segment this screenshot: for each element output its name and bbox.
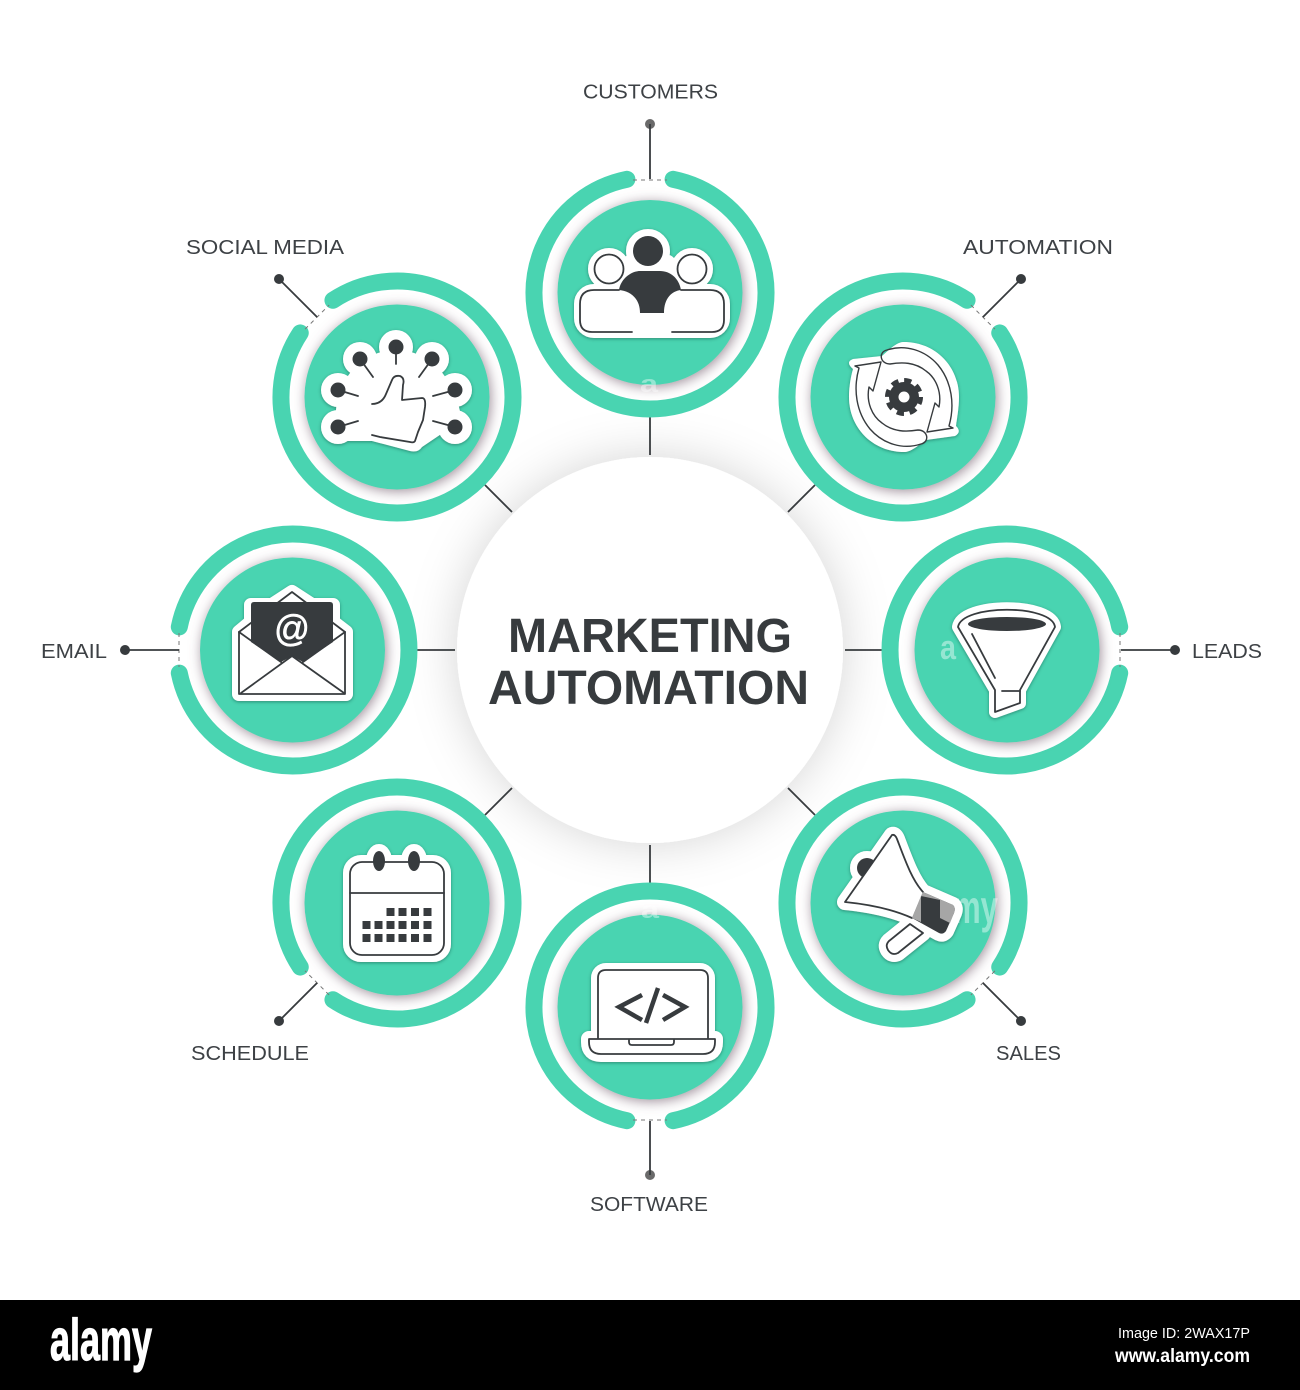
footer bar [0, 1300, 1300, 1390]
label: email: EMAIL [41, 640, 107, 663]
label: automation: AUTOMATION [963, 236, 1113, 259]
node: social media [235, 235, 561, 561]
node: sales [739, 739, 1065, 1065]
title [488, 610, 809, 715]
icon: funnel [958, 608, 1055, 712]
label: software: SOFTWARE [590, 1193, 708, 1216]
watermark fragment: my [953, 881, 998, 933]
node: customers [534, 179, 766, 409]
icon: calendar [350, 851, 444, 955]
icon: automation [849, 342, 959, 452]
label: customers: CUSTOMERS [583, 80, 718, 104]
icon: thumbs up network [321, 330, 472, 452]
node: leads [890, 534, 1120, 766]
icon: laptop [589, 970, 715, 1054]
label: schedule: SCHEDULE [191, 1042, 309, 1065]
node: software [534, 891, 766, 1121]
label: social media: SOCIAL MEDIA [186, 236, 344, 259]
title: MARKETING [508, 610, 792, 663]
leader: leads [1121, 645, 1180, 655]
leader: schedule [274, 983, 317, 1026]
watermark fragment: a [640, 371, 659, 398]
footer image id: Image ID: 2WAX17P [1118, 1325, 1250, 1342]
icon: customers [580, 236, 724, 332]
leader: email [120, 645, 179, 655]
icon: megaphone [845, 835, 955, 954]
center circle [457, 457, 843, 843]
leader: software [645, 1121, 655, 1180]
leader: sales [983, 983, 1026, 1026]
leader: automation [983, 274, 1026, 317]
inner connector lines [415, 415, 885, 885]
leader: social media [274, 274, 317, 317]
icon: envelope [239, 592, 346, 694]
label: sales: SALES [996, 1042, 1061, 1065]
at sign: @ [274, 608, 310, 649]
node: automation [739, 235, 1065, 561]
title: AUTOMATION [488, 662, 809, 715]
node: schedule [235, 739, 561, 1065]
node: email [179, 534, 409, 766]
watermark fragment: a [641, 897, 660, 924]
footer logo: alamy [50, 1308, 152, 1373]
label: leads: LEADS [1192, 640, 1262, 663]
footer url: www.alamy.com [1114, 1346, 1250, 1367]
watermark fragment: a [940, 629, 957, 667]
leader: customers [645, 119, 655, 179]
